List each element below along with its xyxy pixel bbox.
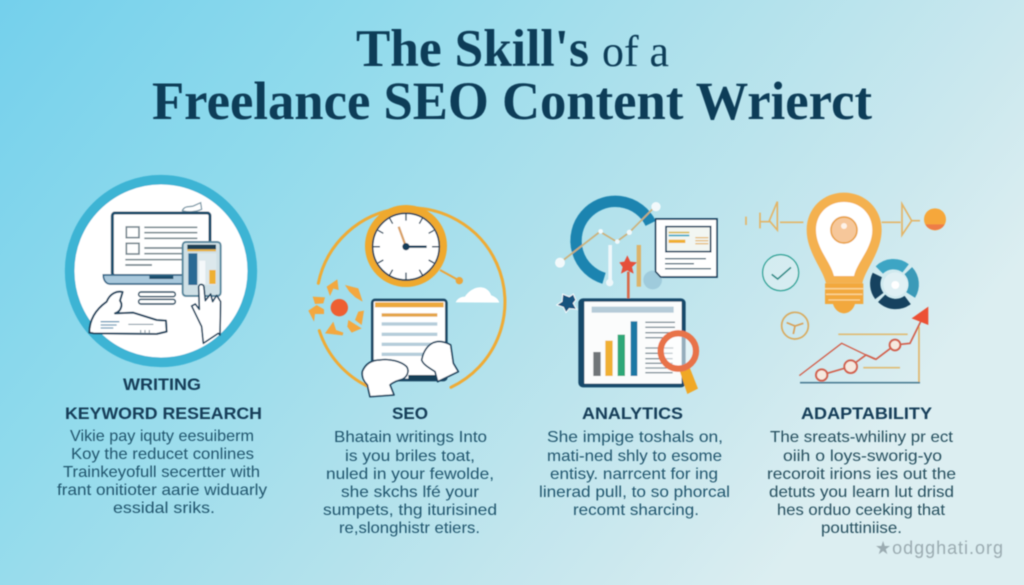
text block: keyword research: frant onitioter aarie widuarly [57,482,267,499]
heading: seo: SEO [392,405,428,423]
text block: adaptability: hes orduo ceeking that [777,502,946,519]
text block: keyword research [57,428,267,517]
heading: writing: WRITING [123,376,201,394]
text block: seo: she skchs lfé your [341,484,480,501]
heading: keyword research: KEYWORD RESEARCH [65,405,262,423]
text block: adaptability: recoroit irions ies out the [767,466,956,483]
heading: analytics: ANALYTICS [582,405,683,423]
text block: analytics [539,429,730,519]
text block: adaptability: oiih o loys-sworig-yo [783,448,942,465]
title: The Skill's [356,20,589,78]
text block: adaptability [767,429,956,537]
title: Freelance SEO Content Wrierct [152,71,872,131]
text block: seo: sumpets, thg iturisined [323,502,497,519]
text block: adaptability: detuts you learn lut drisd [769,484,954,501]
text block: seo: Bhatain writings Into [334,429,487,446]
text block: seo: nuled in your fewolde, [326,466,494,483]
text block: seo: re,slonghistr etiers. [339,520,480,537]
text block: analytics: recomt sharcing. [573,502,699,519]
text block: seo: is you briles toat, [345,448,475,465]
text block: keyword research: essidal sriks. [113,500,215,517]
icon: adaptability, light bulb and charts [746,193,946,383]
text block: analytics: entisy. narrcent for ing [550,466,718,483]
icon: analytics, charts and clipboard [555,201,717,394]
icon: writing, laptop and tablet in circle [70,180,252,362]
text block: analytics: mati-ned shly to esome [547,448,722,465]
title: of a [602,27,669,76]
icon: seo, clock and tablet in orbit [308,205,505,397]
text block: adaptability: pouttiniise. [821,520,902,537]
text block: seo [323,429,497,537]
text block: analytics: linerad pull, to so phorcal [539,484,730,501]
watermark: ★odgghati.org [875,538,1003,558]
text block: analytics: She impige toshals on, [547,429,723,446]
title [152,20,872,131]
text block: keyword research: Vikie pay iquty eesuiberm [70,428,254,445]
text block: keyword research: Trainkeyofull secertter with [63,464,260,481]
text block: keyword research: Koy the reducet conlines [71,446,254,463]
heading: adaptability: ADAPTABILITY [801,405,932,423]
text block: adaptability: The sreats-whiliny pr ect [770,429,954,446]
